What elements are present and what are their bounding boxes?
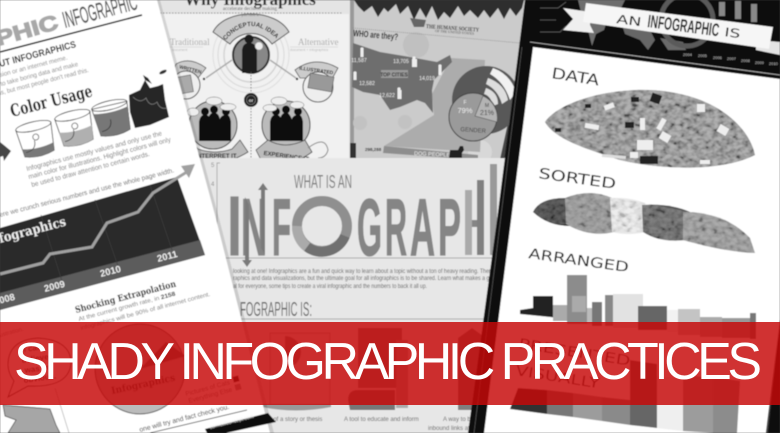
tablet right edge	[768, 320, 780, 433]
bar: dog people: DOG PEOPLE	[414, 151, 451, 159]
paragraph: color usage: Infographics use mostly values and only use the	[26, 130, 163, 173]
dark header graphics: 2007	[727, 56, 737, 61]
icon: paint bucket one	[15, 118, 58, 160]
chart: infographic growth: 2009	[43, 279, 66, 295]
heading: what is an: WHAT IS AN	[294, 172, 352, 192]
chart: pie of infographics	[95, 324, 242, 414]
vertical divider with or badge: or	[249, 98, 253, 103]
heading: why infographics: accelerate decision making	[223, 7, 278, 12]
diagram: illustrated branch: ILLUSTRATED	[299, 66, 334, 76]
chart: age donut	[452, 66, 520, 134]
panel: why infographics poster	[156, 0, 351, 163]
chart: gender circle: GENDER	[460, 127, 487, 135]
captions under icons: tion of a story or thesis	[262, 417, 322, 423]
section: about infographics	[0, 39, 90, 97]
icon row under banner	[262, 328, 486, 410]
diagram: conceptual idea fan	[212, 12, 290, 94]
map illustration	[3, 388, 69, 433]
panel: left infographic page	[0, 0, 276, 433]
chart axis	[211, 163, 495, 258]
footer: source bar	[205, 413, 276, 433]
label: arranged: ARRANGED	[527, 246, 630, 276]
lego pile: data	[545, 90, 755, 168]
page title	[0, 0, 142, 52]
panel: what is an infographic poster: FOGRAPHIC IS:	[240, 299, 312, 321]
labels: traditional and alternative: Alternative	[298, 37, 338, 47]
chart: pie of infographics: Infographics	[110, 373, 176, 397]
map: united states: TOP CITIES	[380, 72, 408, 78]
title letters: infographic: G	[357, 183, 382, 273]
white sheet	[484, 47, 780, 433]
logo: humane society: THE HUMANE SOCIETY	[426, 24, 480, 34]
dark header graphics: 2006	[713, 55, 723, 60]
icon: paint bucket two	[54, 107, 97, 149]
heading: color usage: Color Usage	[8, 82, 95, 122]
labels: traditional and alternative: document + infographics	[290, 48, 328, 52]
panel: humane society poster	[350, 0, 535, 164]
tablet edge highlight	[474, 47, 522, 433]
lego chart: presented visually bars	[510, 360, 740, 433]
bar: dog people: 298,288	[365, 147, 382, 152]
paragraph: color usage: be used to draw attention to certain words.	[31, 151, 151, 189]
silhouettes of people and dogs	[354, 0, 524, 20]
chart: age donut: A	[510, 113, 515, 120]
label: presented visually	[514, 336, 631, 392]
dark header graphics	[540, 0, 779, 66]
dark header graphics: 2004	[683, 52, 693, 57]
captions under icons: inbound links at	[428, 426, 470, 432]
chart: infographic growth: 2011	[156, 249, 179, 265]
diagram: written branch	[172, 61, 248, 162]
map: united states	[351, 43, 452, 113]
captions under icons	[262, 417, 474, 432]
chart axis: 4	[211, 182, 215, 188]
chart: pie of infographics: Pictures of Cats	[185, 379, 232, 398]
callout: speech bubble	[8, 338, 71, 397]
lego chart: arranged city	[520, 275, 756, 339]
heading: who are they: WHO are they?	[353, 28, 399, 42]
section: about infographics: to take boring data and make	[0, 61, 79, 88]
title letters: infographic: F	[272, 183, 291, 273]
diagram: conceptual idea fan: CONCEPTUAL IDEA	[222, 21, 278, 40]
section: shocking extrapolation: Shocking Extrapolation	[74, 280, 178, 316]
section: shocking extrapolation: infographics will be 90% of all internet content.	[80, 292, 211, 332]
label: data: DATA	[550, 64, 601, 90]
logo: humane society	[410, 18, 480, 36]
dark header graphics: 2010	[769, 61, 779, 66]
intro paragraph: looking at one! Infographics are a fun and quick way to learn about a topic without a ton of heavy reading. There a	[233, 269, 499, 275]
map: united states: 13,705	[393, 59, 409, 65]
captions under icons: A way to bu	[443, 417, 474, 423]
ribbon: an infographic is: IS	[724, 25, 741, 41]
arrows from idea to paths	[203, 60, 298, 80]
chart: gender circle: F	[463, 100, 467, 106]
chart axis: 5	[211, 163, 215, 169]
intro paragraph	[233, 269, 499, 290]
ribbon: an infographic is: INFOGRAPHIC	[646, 11, 720, 40]
chart: gender circle: 21%	[480, 110, 494, 117]
panel: what is an infographic poster	[150, 158, 515, 433]
paragraph: color usage: main color for illustrations. Highlight colors will only	[28, 136, 172, 181]
labels: traditional and alternative: document	[172, 48, 187, 52]
diagram: written branch: INTERPRET IT	[195, 154, 237, 160]
labels: traditional and alternative	[168, 37, 338, 52]
label: presented visually: VISUALLY	[514, 363, 601, 392]
diagram: illustrated branch	[256, 62, 338, 164]
labels: traditional and alternative: Traditional	[170, 37, 210, 47]
funnel from map to gender circle	[384, 58, 485, 152]
section: about infographics: is, but most people don't read this.	[0, 67, 90, 97]
map: united states: 12,582	[359, 81, 375, 87]
captions under icons: A tool to educate and inform	[344, 417, 419, 423]
section: about infographics: UT INFOGRAPHICS	[0, 39, 77, 70]
map: united states: 11,587	[351, 58, 367, 64]
vertical divider with or badge	[244, 72, 258, 158]
icon: overflowing paint bucket	[129, 69, 169, 128]
ribbon: an infographic is	[563, 3, 780, 55]
chart: infographic growth: 2010	[99, 264, 122, 280]
diagram: conceptual idea fan: you have a	[241, 13, 259, 17]
arrow: down	[242, 197, 252, 267]
title letters: infographic: P	[438, 183, 461, 273]
ribbon: an infographic is: AN	[616, 12, 642, 29]
callout: speech bubble: believe	[21, 352, 50, 365]
intro paragraph: raphics and data visualizations, but the ultimate goal for all infographics is to be shared. Learn what makes a grea	[233, 276, 498, 282]
title letters: infographic: A	[410, 183, 435, 273]
icon: paint bucket three	[91, 97, 134, 139]
bar: dog people	[350, 143, 478, 160]
banner: title	[0, 322, 780, 405]
diagram: written branch: WRITTEN	[178, 64, 202, 76]
section: shocking extrapolation	[74, 280, 211, 332]
footer: source bar: comicalconcept.com	[209, 414, 254, 431]
intro paragraph: al for everyone, some tips to create a viral infographic and the numbers to back it all up.	[233, 284, 427, 290]
arrow: up	[258, 183, 268, 255]
title letters: infographic	[231, 164, 497, 273]
title text: SHADY INFOGRAPHIC PRACTICES	[14, 333, 762, 391]
chart: gender circle: 79%	[457, 106, 473, 115]
chart: infographic growth	[0, 164, 205, 310]
logo: humane society: OF THE UNITED STATES	[435, 29, 474, 36]
dark header graphics: 2009	[755, 60, 765, 65]
label: sorted: SORTED	[537, 166, 617, 193]
label: presented visually: PRESENTED	[517, 336, 631, 370]
text: chart intro: ere we crunch serious numbers and use the whole page width.	[0, 167, 175, 219]
callout: speech bubble: was so	[23, 362, 52, 375]
panel: tablet with an infographic is poster	[468, 0, 780, 433]
chart: pie of infographics: Everything Else	[188, 386, 234, 405]
lego pile: sorted	[533, 193, 755, 253]
diagram: illustrated branch: EXPERIENCE IT	[263, 151, 309, 163]
section: shocking extrapolation: At the current growth rate, in 2158	[78, 291, 177, 323]
title letters: infographic: N	[241, 183, 267, 273]
callout: speech bubble: I can	[23, 343, 42, 354]
section: about infographics: sion or an internet meme.	[0, 54, 68, 79]
dark header graphics: 2008	[741, 58, 751, 63]
title letters: infographic: R	[385, 183, 407, 273]
chart: gender circle: M	[485, 103, 489, 109]
callout: speech bubble: obvious.	[23, 371, 57, 385]
chart: gender circle	[449, 93, 497, 141]
map: united states: 12,622	[379, 93, 395, 99]
icon: arrow	[0, 142, 11, 161]
map: united states: 14,019	[419, 76, 435, 82]
dark header graphics: 2005	[698, 53, 708, 58]
